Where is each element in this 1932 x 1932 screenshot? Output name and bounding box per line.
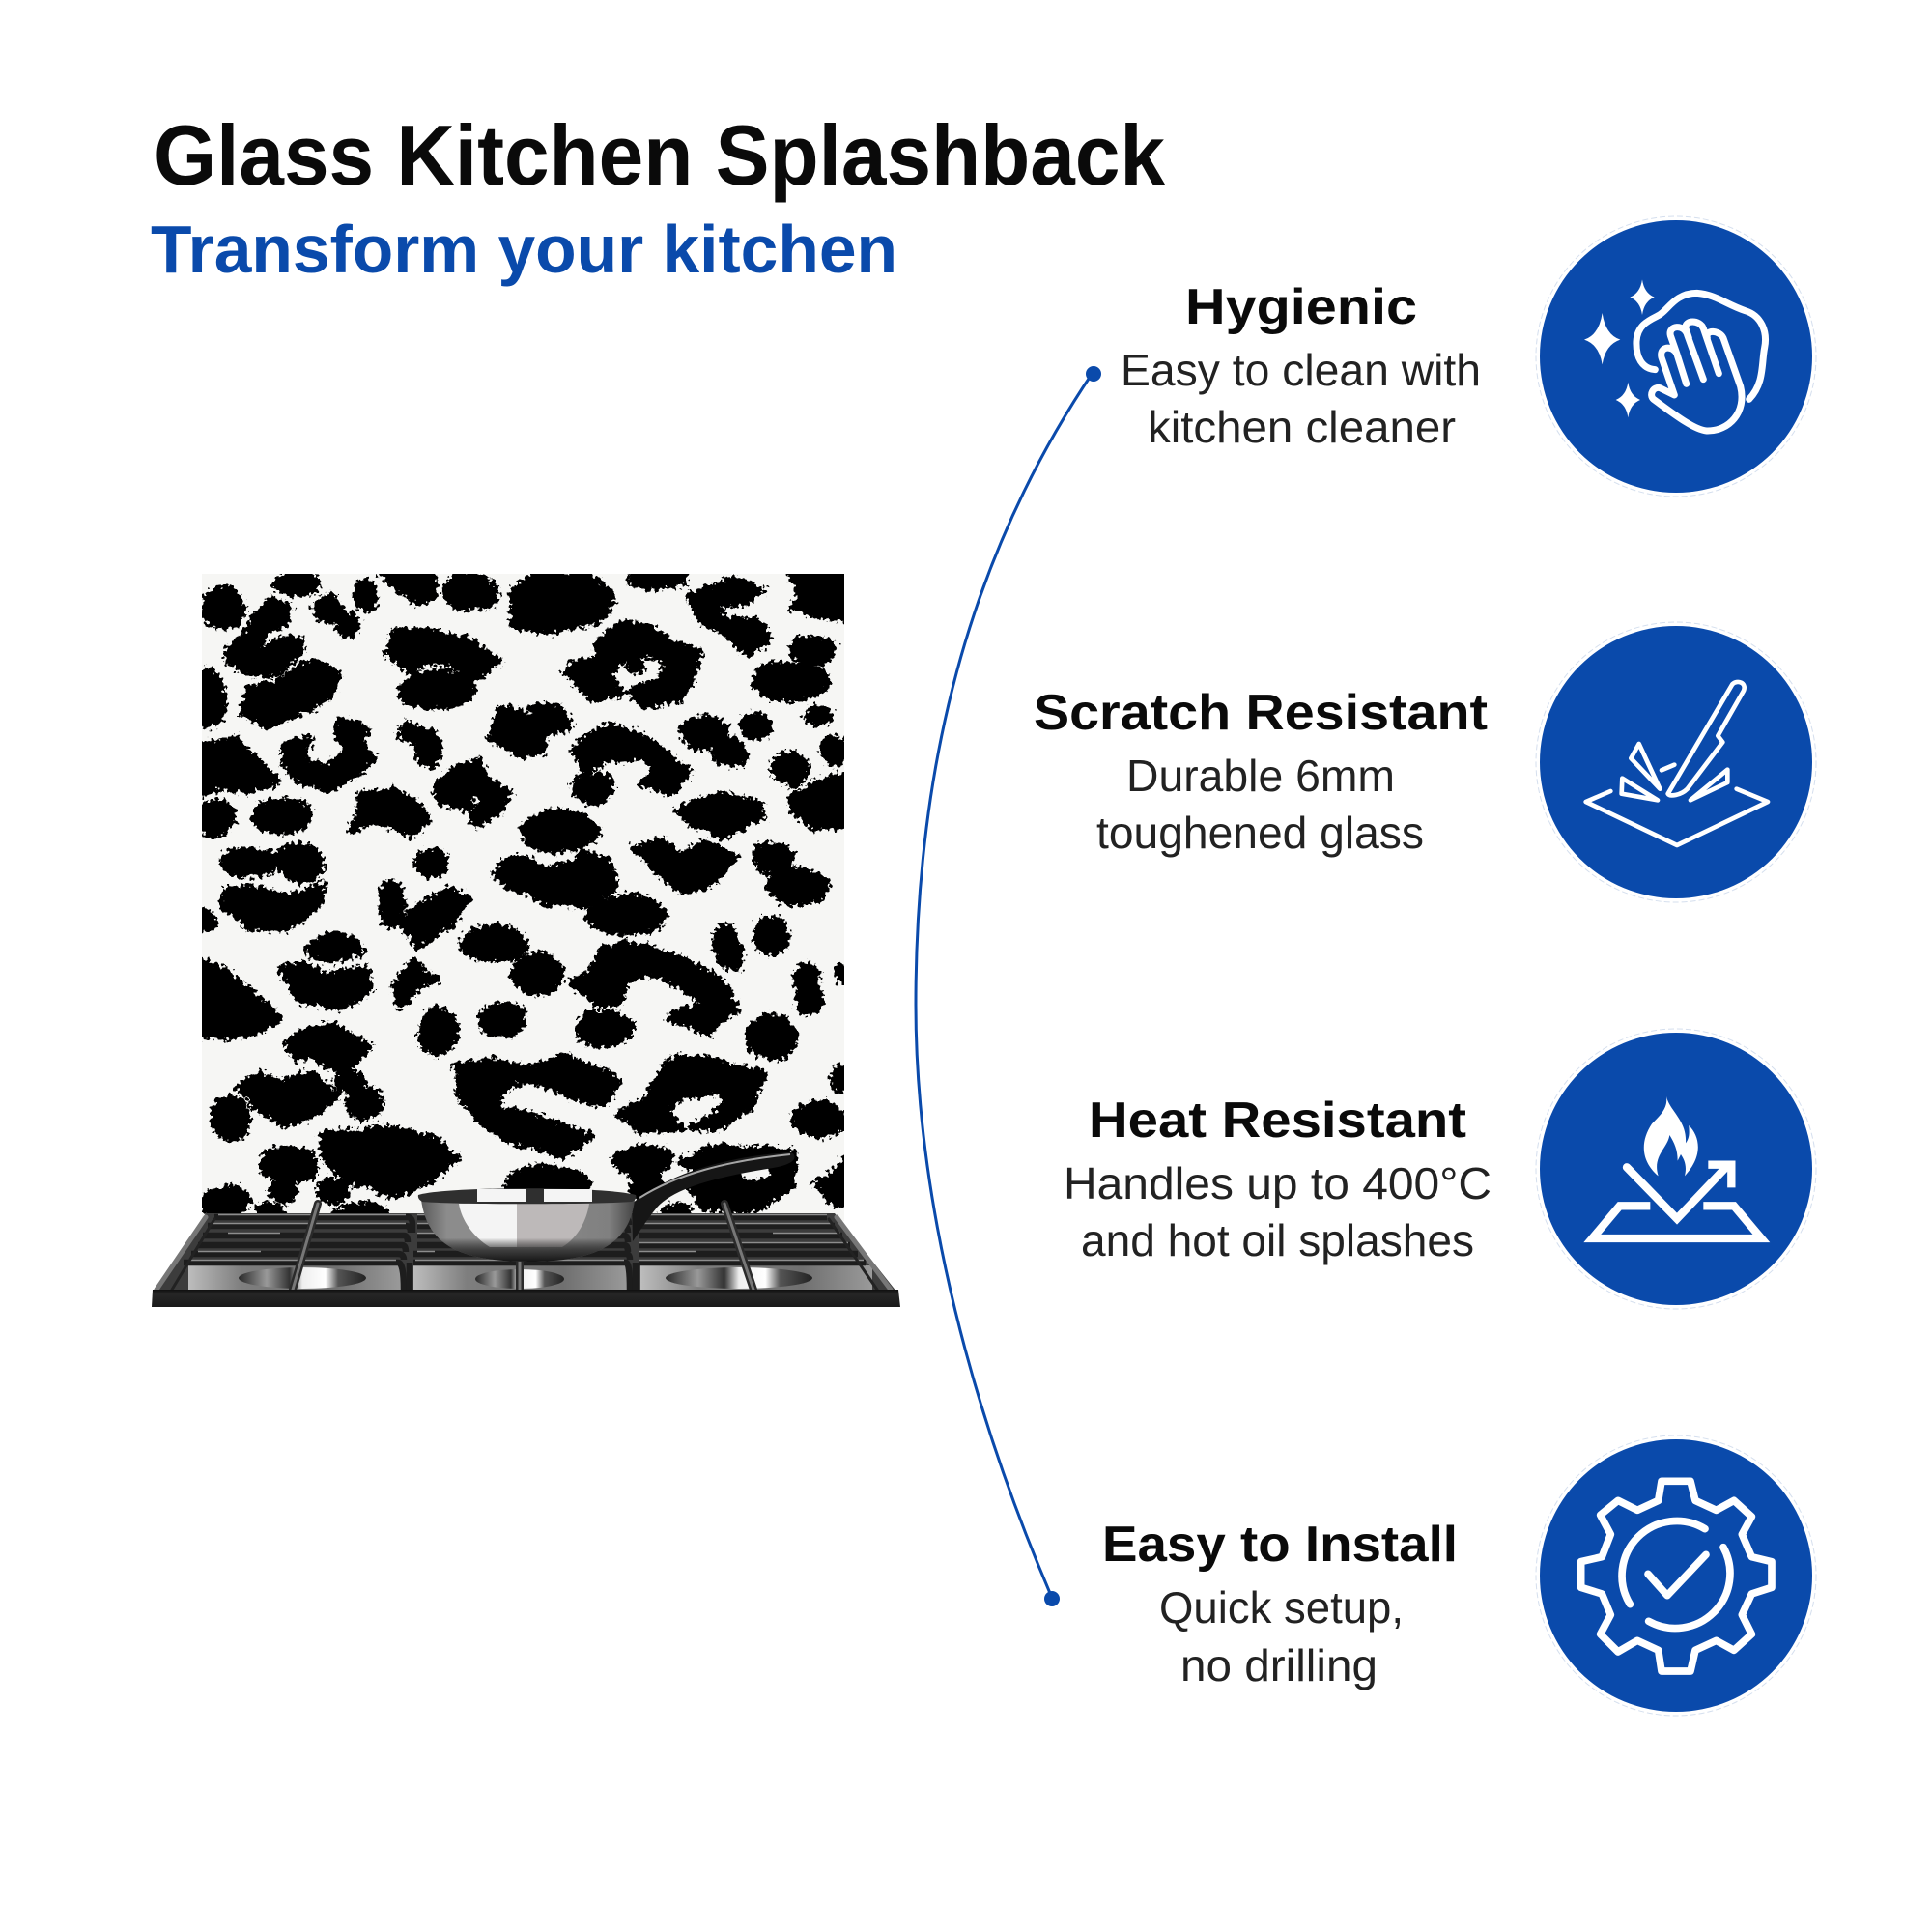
- feature: heat resistant: Heat Resistant: [1089, 1093, 1466, 1149]
- icon: knife on glass: [1536, 622, 1816, 902]
- feature: scratch resistant: [1034, 685, 1488, 858]
- frying pan: [418, 1152, 794, 1262]
- feature: hygienic: kitchen cleaner: [1148, 402, 1456, 452]
- splashback panel: [189, 568, 849, 1221]
- subtitle: Transform your kitchen: [151, 212, 897, 287]
- connector curve: [916, 366, 1101, 1606]
- feature: hygienic: Easy to clean with: [1121, 345, 1481, 395]
- icon: flame and heat reflection: [1536, 1029, 1816, 1309]
- feature: scratch resistant: Scratch Resistant: [1034, 685, 1488, 741]
- feature: scratch resistant: Durable 6mm: [1126, 751, 1395, 801]
- product image: leopard print splashback over gas hob: [152, 568, 900, 1307]
- hob front edge: [152, 1290, 900, 1307]
- icon: hand wiping: [1536, 216, 1816, 497]
- gas hob: [152, 1204, 900, 1307]
- feature: hygienic: [1121, 279, 1481, 452]
- title: Glass Kitchen Splashback: [154, 107, 1166, 203]
- feature: hygienic: Hygienic: [1185, 279, 1417, 335]
- feature: easy to install: Quick setup,: [1159, 1582, 1404, 1633]
- feature: heat resistant: and hot oil splashes: [1081, 1215, 1474, 1265]
- feature: heat resistant: Handles up to 400°C: [1064, 1158, 1492, 1208]
- feature: scratch resistant: toughened glass: [1096, 808, 1424, 858]
- feature: easy to install: Easy to Install: [1102, 1517, 1458, 1573]
- feature: easy to install: [1102, 1517, 1458, 1690]
- feature: easy to install: no drilling: [1180, 1640, 1378, 1690]
- icon: gear with check mark: [1536, 1435, 1816, 1716]
- feature: heat resistant: [1064, 1093, 1492, 1265]
